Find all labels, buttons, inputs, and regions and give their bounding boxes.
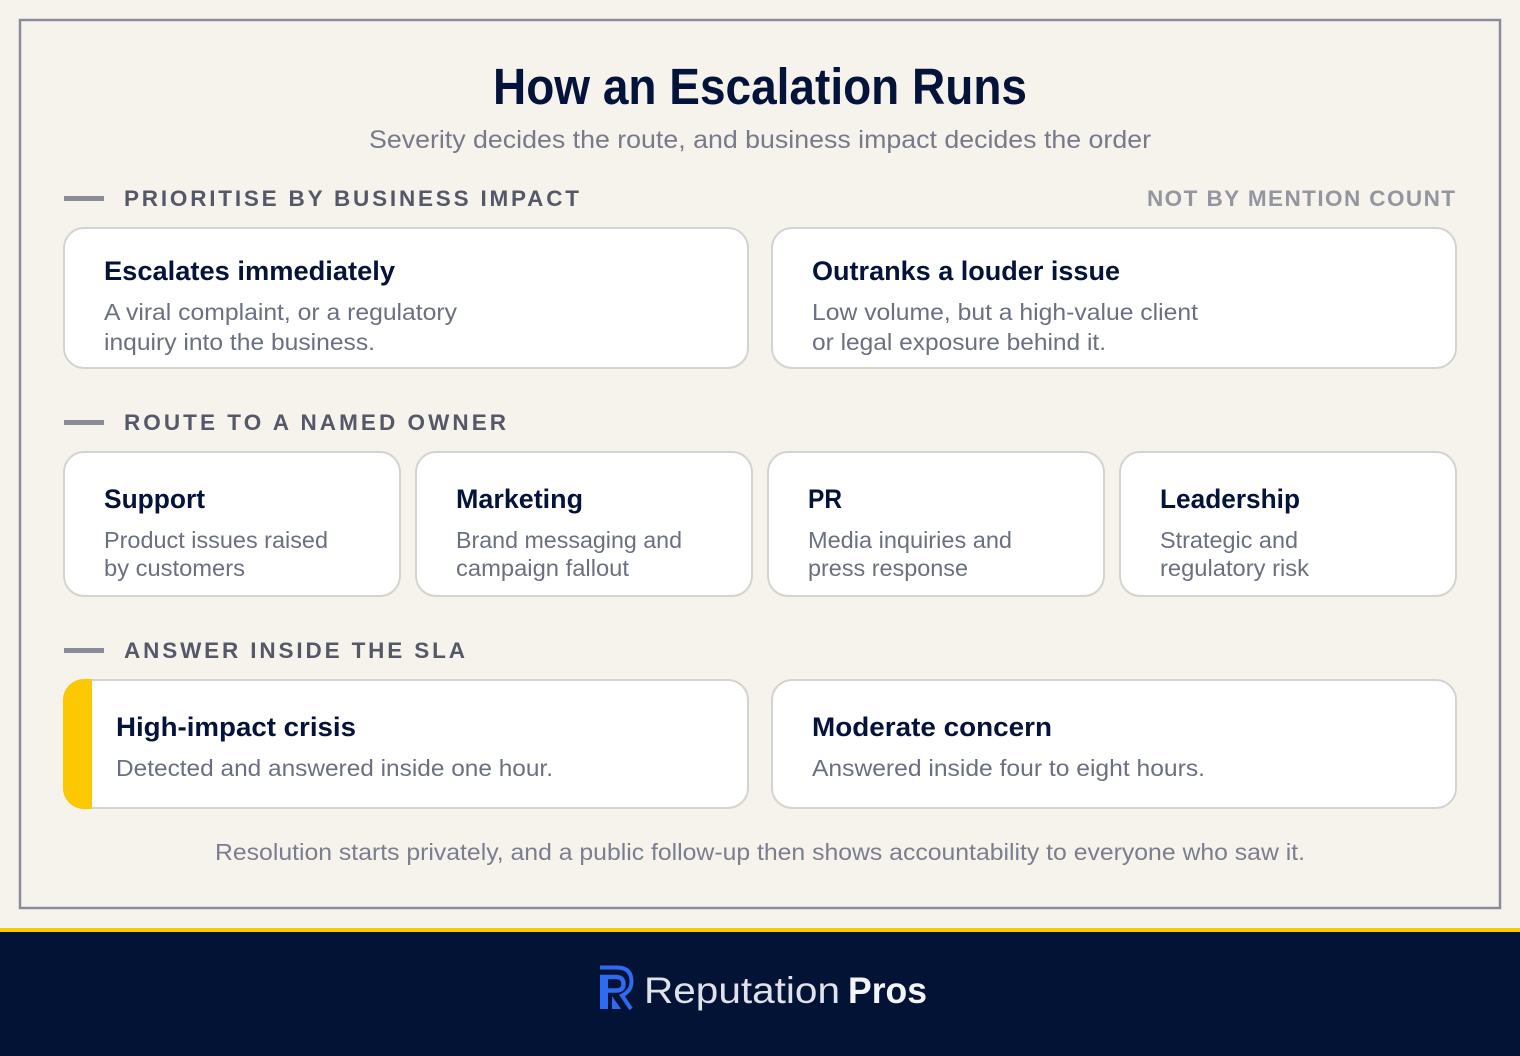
- panel: leadership: Strategic and: [1160, 527, 1298, 553]
- section: prioritise by business impact: PRIORITISE BY BUSINESS IMPACT: [124, 186, 579, 211]
- icon: R mark: [600, 968, 632, 1009]
- panel: PR: [768, 452, 1104, 596]
- section: prioritise by business impact: NOT BY MENTION COUNT: [1147, 186, 1455, 211]
- panel: high-impact crisis: [63, 679, 748, 809]
- panel: escalates immediately: Escalates immediately: [104, 256, 395, 286]
- panel: escalates immediately: [64, 228, 748, 368]
- logo: [600, 968, 927, 1011]
- panel: leadership: regulatory risk: [1160, 555, 1310, 581]
- panel: PR: Media inquiries and: [808, 527, 1012, 553]
- panel: leadership: Leadership: [1160, 484, 1300, 514]
- panel: support: Support: [104, 484, 205, 514]
- panel: outranks a louder issue: or legal exposure behind it.: [812, 329, 1106, 355]
- footer band: [0, 928, 1520, 1056]
- panel: moderate concern: [772, 680, 1456, 808]
- panel: high-impact crisis: Detected and answered inside one hour.: [116, 755, 553, 781]
- panel: escalates immediately: A viral complaint, or a regulatory: [104, 299, 457, 325]
- logo: Pros: [848, 970, 927, 1011]
- panel: marketing: campaign fallout: [456, 555, 630, 581]
- panel: support: by customers: [104, 555, 245, 581]
- panel: high-impact crisis: High-impact crisis: [116, 712, 356, 742]
- closing note: Resolution starts privately, and a public follow-up then shows accountability to everyone who saw it.: [215, 839, 1305, 865]
- panel: marketing: Marketing: [456, 484, 583, 514]
- panel: PR: PR: [808, 484, 842, 514]
- panel: leadership: [1120, 452, 1456, 596]
- panel: support: [64, 452, 400, 596]
- section: prioritise by business impact: [64, 186, 1455, 211]
- title: How an Escalation Runs: [493, 58, 1027, 115]
- logo: Reputation: [644, 970, 840, 1011]
- section: answer inside the SLA: ANSWER INSIDE THE SLA: [124, 638, 465, 663]
- section: route to a named owner: ROUTE TO A NAMED OWNER: [124, 410, 506, 435]
- panel: support: Product issues raised: [104, 527, 328, 553]
- panel: escalates immediately: inquiry into the business.: [104, 329, 375, 355]
- panel: marketing: [416, 452, 752, 596]
- panel: outranks a louder issue: Outranks a louder issue: [812, 256, 1120, 286]
- panel: marketing: Brand messaging and: [456, 527, 682, 553]
- subtitle: Severity decides the route, and business impact decides the order: [369, 126, 1151, 154]
- panel: outranks a louder issue: Low volume, but a high-value client: [812, 299, 1198, 325]
- panel: PR: press response: [808, 555, 968, 581]
- panel: outranks a louder issue: [772, 228, 1456, 368]
- panel: moderate concern: Answered inside four to eight hours.: [812, 755, 1205, 781]
- panel: moderate concern: Moderate concern: [812, 712, 1052, 742]
